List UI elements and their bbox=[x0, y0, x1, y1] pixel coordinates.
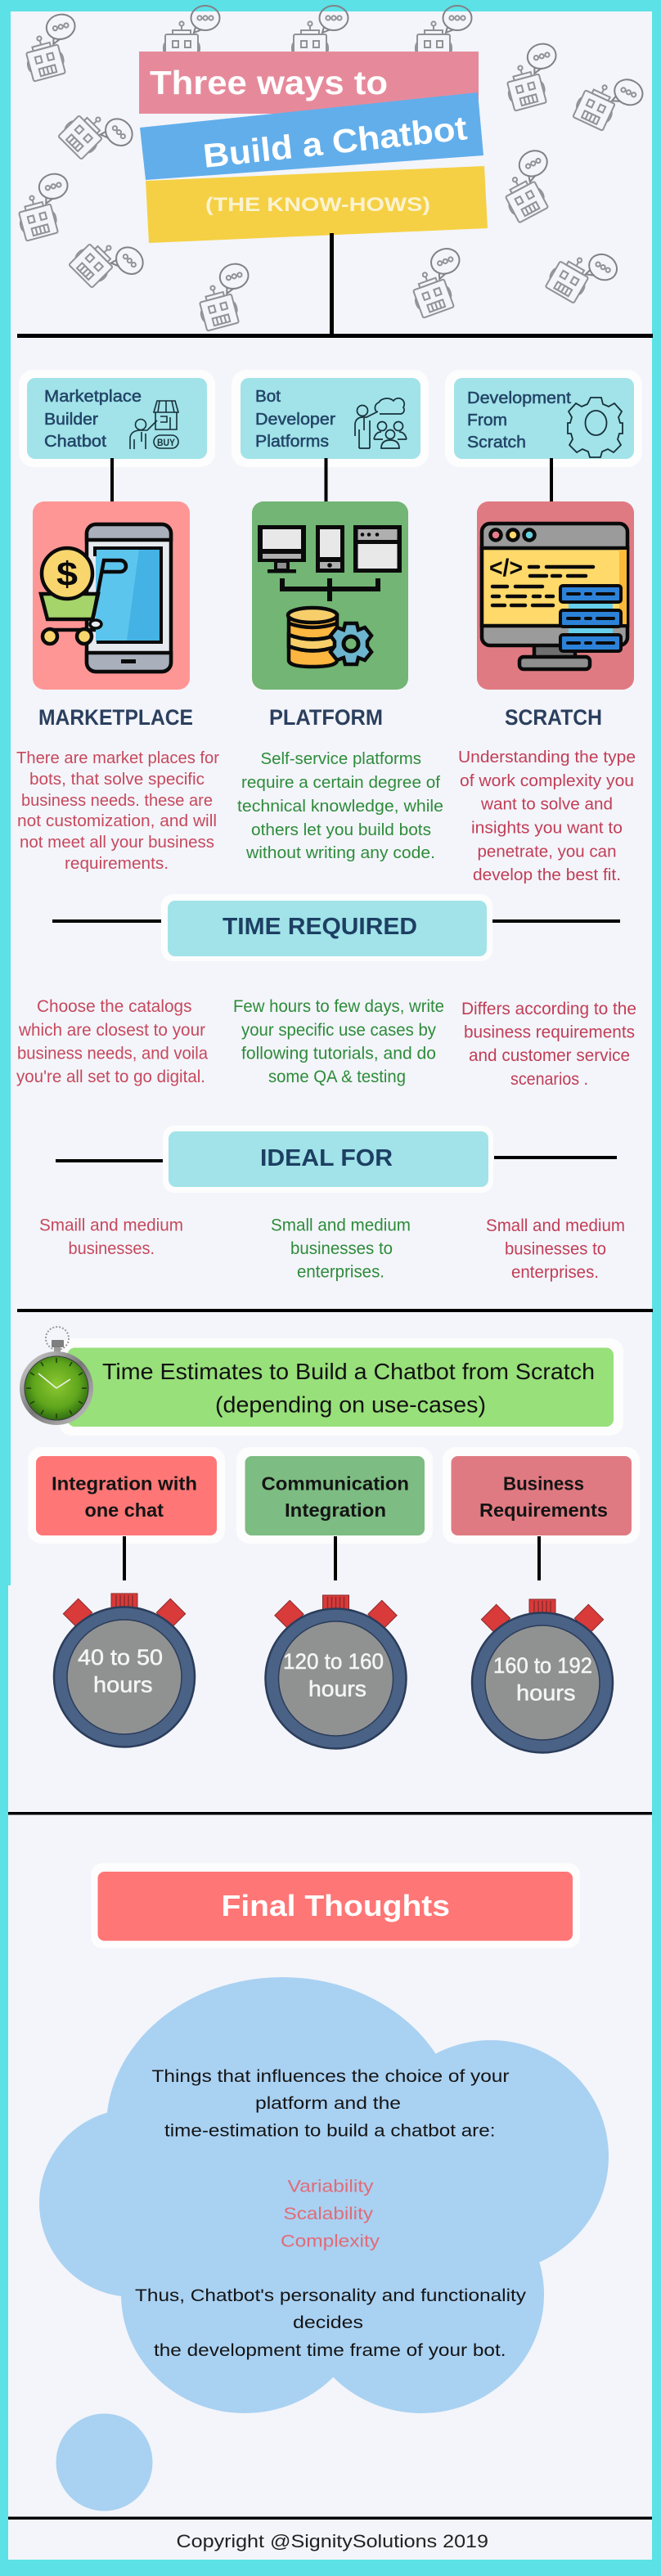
text: influences: platform and the bbox=[255, 2094, 401, 2113]
headings: three approaches: SCRATCH bbox=[505, 705, 602, 730]
card: bot developer platforms: Bot bbox=[255, 388, 281, 406]
text: platform time required: some QA & testing bbox=[268, 1068, 406, 1086]
connectors from cards to panels bbox=[110, 458, 553, 501]
text: scratch ideal for bbox=[486, 1216, 625, 1282]
icon: store with buyer: BUY bbox=[157, 437, 175, 448]
text: scratch ideal for: Small and medium bbox=[486, 1216, 625, 1235]
card: development from scratch: Scratch bbox=[467, 434, 526, 452]
text: scratch time required: scenarios . bbox=[510, 1070, 588, 1089]
text: scratch ideal for: enterprises. bbox=[511, 1263, 599, 1282]
stopwatch: 40 to 50 hours: 40 to 50 bbox=[78, 1645, 163, 1670]
text: conclusion: Thus, Chatbot's personality and functionality bbox=[135, 2286, 527, 2305]
stopwatch: 120 to 160 hours: hours bbox=[308, 1677, 366, 1702]
icon: server stack bbox=[560, 586, 621, 651]
card: integration with one chat bbox=[28, 1447, 225, 1544]
title connector and divider bbox=[17, 233, 653, 338]
icon: phone bbox=[87, 524, 171, 672]
icon: green pocket watch bbox=[20, 1327, 93, 1425]
banner: time estimates: (depending on use-cases) bbox=[215, 1392, 486, 1417]
card: development from scratch bbox=[445, 370, 642, 467]
icon: monitor bbox=[258, 525, 306, 573]
text: influences bbox=[152, 2067, 510, 2140]
text: marketplace description: requirements. bbox=[65, 855, 169, 873]
card: bot developer platforms: Developer bbox=[255, 411, 335, 429]
panel: marketplace icon bbox=[33, 501, 190, 690]
text: platform description: others let you build bots bbox=[251, 821, 431, 839]
text: scratch description: want to solve and bbox=[480, 795, 613, 813]
panel: scratch icon bbox=[477, 501, 634, 690]
text: marketplace description: not meet all your business bbox=[20, 834, 214, 852]
text: marketplace description: There are market places for bbox=[16, 749, 219, 767]
card: integration with one chat: one chat bbox=[85, 1499, 164, 1521]
headings: three approaches bbox=[38, 705, 602, 730]
card: development from scratch: Development bbox=[467, 389, 571, 407]
text: scratch time required: Differs according to the bbox=[461, 1000, 636, 1018]
banner: time estimates bbox=[59, 1338, 623, 1436]
stopwatch: 120 to 160 hours: 120 to 160 bbox=[283, 1649, 384, 1674]
headings: three approaches: PLATFORM bbox=[269, 705, 383, 730]
text: scratch time required: and customer service bbox=[469, 1046, 630, 1065]
card: communication integration: Communication bbox=[262, 1472, 409, 1494]
icon: database bbox=[288, 608, 337, 667]
card: marketplace builder chatbot bbox=[19, 370, 215, 467]
card: marketplace builder chatbot: Builder bbox=[44, 411, 98, 429]
card: bot developer platforms bbox=[232, 370, 429, 467]
text: scratch description: penetrate, you can bbox=[478, 843, 617, 861]
thought bubble small circle bbox=[56, 2413, 152, 2511]
thought cloud bbox=[39, 1977, 609, 2413]
text: scratch description: insights you want to bbox=[471, 820, 623, 838]
card: bot developer platforms: Platforms bbox=[255, 433, 329, 451]
text: conclusion: decides bbox=[293, 2313, 363, 2332]
text: scratch description: of work complexity you bbox=[460, 772, 634, 790]
text: marketplace time required: you're all set to go digital. bbox=[16, 1068, 205, 1086]
text: marketplace description: business needs. these are bbox=[21, 792, 213, 810]
text: platform time required: your specific use cases by bbox=[241, 1021, 436, 1040]
card: business requirements: Business bbox=[503, 1472, 584, 1494]
text: scratch ideal for: businesses to bbox=[505, 1240, 606, 1258]
text: platform ideal for bbox=[271, 1216, 411, 1281]
icon: shopping cart with coin bbox=[41, 548, 126, 644]
banner: time estimates: Time Estimates to Build a Chatbot from Scratch bbox=[102, 1359, 595, 1384]
text: marketplace time required: which are closest to your bbox=[18, 1021, 205, 1040]
stopwatch: 160 to 192 hours: 160 to 192 bbox=[493, 1653, 592, 1678]
title pink band bbox=[139, 52, 479, 114]
text: platform description bbox=[237, 750, 443, 862]
heading bar: time required bbox=[52, 894, 620, 961]
icon: browser window bbox=[353, 525, 402, 573]
connector tree bbox=[282, 578, 378, 601]
text: scratch description: develop the best fit. bbox=[473, 866, 621, 884]
panel: platform icon bbox=[252, 501, 408, 690]
text: conclusion bbox=[135, 2286, 527, 2360]
text: marketplace ideal for bbox=[39, 1216, 183, 1258]
connectors from cards to stopwatches bbox=[123, 1536, 541, 1580]
icon: presenter, cloud and audience bbox=[355, 398, 407, 448]
stopwatch: 160 to 192 hours: hours bbox=[516, 1680, 576, 1705]
heading: final thoughts bbox=[91, 1863, 580, 1949]
text: influences: Things that influences the choice of your bbox=[152, 2067, 510, 2086]
heading bar: ideal for: IDEAL FOR bbox=[260, 1145, 393, 1171]
title line three: (THE KNOW-HOWS) bbox=[205, 194, 430, 216]
text: platform ideal for: businesses to bbox=[290, 1239, 393, 1258]
text: platform description: technical knowledge, while bbox=[237, 798, 443, 816]
title banner bbox=[139, 52, 488, 243]
text: platform description: Self-service platforms bbox=[260, 750, 421, 768]
section divider bbox=[8, 1812, 652, 1814]
text: variability, scalability, complexity bbox=[281, 2178, 380, 2251]
text: platform time required: following tutorials, and do bbox=[241, 1044, 436, 1063]
card: marketplace builder chatbot: Marketplace bbox=[44, 388, 142, 406]
text: variability, scalability, complexity: Complexity bbox=[281, 2232, 380, 2251]
card: business requirements: Requirements bbox=[479, 1499, 608, 1521]
title blue band bbox=[140, 92, 483, 180]
text: marketplace description: not customization, and will bbox=[17, 812, 217, 830]
footer: copyright: Copyright @SignitySolutions 2019 bbox=[177, 2531, 488, 2551]
icon: desktop monitor bbox=[482, 524, 627, 669]
icon: code lines bbox=[489, 555, 593, 605]
title yellow band bbox=[146, 166, 488, 243]
icon: code lines: </> bbox=[489, 555, 523, 582]
text: influences: time-estimation to build a chatbot are: bbox=[164, 2122, 496, 2140]
card: development from scratch: From bbox=[467, 411, 507, 429]
title line two: Build a Chatbot bbox=[201, 109, 469, 175]
text: marketplace time required: Choose the catalogs bbox=[37, 997, 191, 1016]
text: marketplace description bbox=[16, 749, 219, 873]
text: scratch description bbox=[458, 749, 636, 884]
text: variability, scalability, complexity: Variability bbox=[288, 2178, 374, 2196]
stopwatch: 160 to 192 hours bbox=[472, 1599, 613, 1752]
text: platform description: without writing any code. bbox=[245, 844, 435, 862]
text: marketplace ideal for: Smaill and medium bbox=[39, 1216, 183, 1235]
section divider bbox=[17, 1309, 653, 1312]
text: platform time required: Few hours to few days, write bbox=[233, 997, 444, 1016]
text: scratch time required: business requirements bbox=[464, 1023, 635, 1042]
card: integration with one chat: Integration with bbox=[52, 1472, 197, 1494]
icon: shopping cart with coin: $ bbox=[56, 555, 78, 593]
stopwatch: 40 to 50 hours bbox=[54, 1594, 195, 1747]
text: platform time required bbox=[233, 997, 444, 1086]
text: marketplace description: bots, that solve specific bbox=[29, 771, 205, 789]
headings: three approaches: MARKETPLACE bbox=[38, 705, 193, 730]
card: business requirements bbox=[443, 1447, 640, 1544]
background robot icons bbox=[10, 6, 647, 331]
heading: final thoughts: Final Thoughts bbox=[221, 1889, 450, 1922]
text: scratch time required bbox=[461, 1000, 636, 1089]
text: conclusion: the development time frame of your bot. bbox=[154, 2341, 506, 2360]
text: marketplace ideal for: businesses. bbox=[69, 1239, 155, 1258]
text: platform ideal for: Small and medium bbox=[271, 1216, 411, 1235]
heading bar: ideal for bbox=[56, 1126, 617, 1193]
text: variability, scalability, complexity: Scalability bbox=[283, 2205, 374, 2223]
text: marketplace time required bbox=[16, 997, 208, 1086]
text: marketplace time required: business needs, and voila bbox=[17, 1044, 208, 1063]
card: marketplace builder chatbot: Chatbot bbox=[44, 433, 106, 451]
stopwatch: 40 to 50 hours: hours bbox=[93, 1672, 152, 1697]
icon: gear bbox=[568, 398, 623, 457]
text: scratch description: Understanding the type bbox=[458, 749, 636, 767]
card: communication integration: Integration bbox=[285, 1499, 386, 1521]
stopwatch: 120 to 160 hours bbox=[265, 1595, 406, 1749]
footer divider bbox=[8, 2516, 652, 2520]
card: communication integration bbox=[236, 1447, 433, 1544]
heading bar: time required: TIME REQUIRED bbox=[223, 914, 417, 940]
icon: gear bbox=[330, 623, 371, 664]
icon: tablet bbox=[316, 525, 344, 573]
text: platform ideal for: enterprises. bbox=[297, 1263, 384, 1281]
icon: store with buyer bbox=[130, 401, 178, 449]
title line one: Three ways to bbox=[150, 64, 388, 101]
text: platform description: require a certain degree of bbox=[241, 774, 440, 792]
